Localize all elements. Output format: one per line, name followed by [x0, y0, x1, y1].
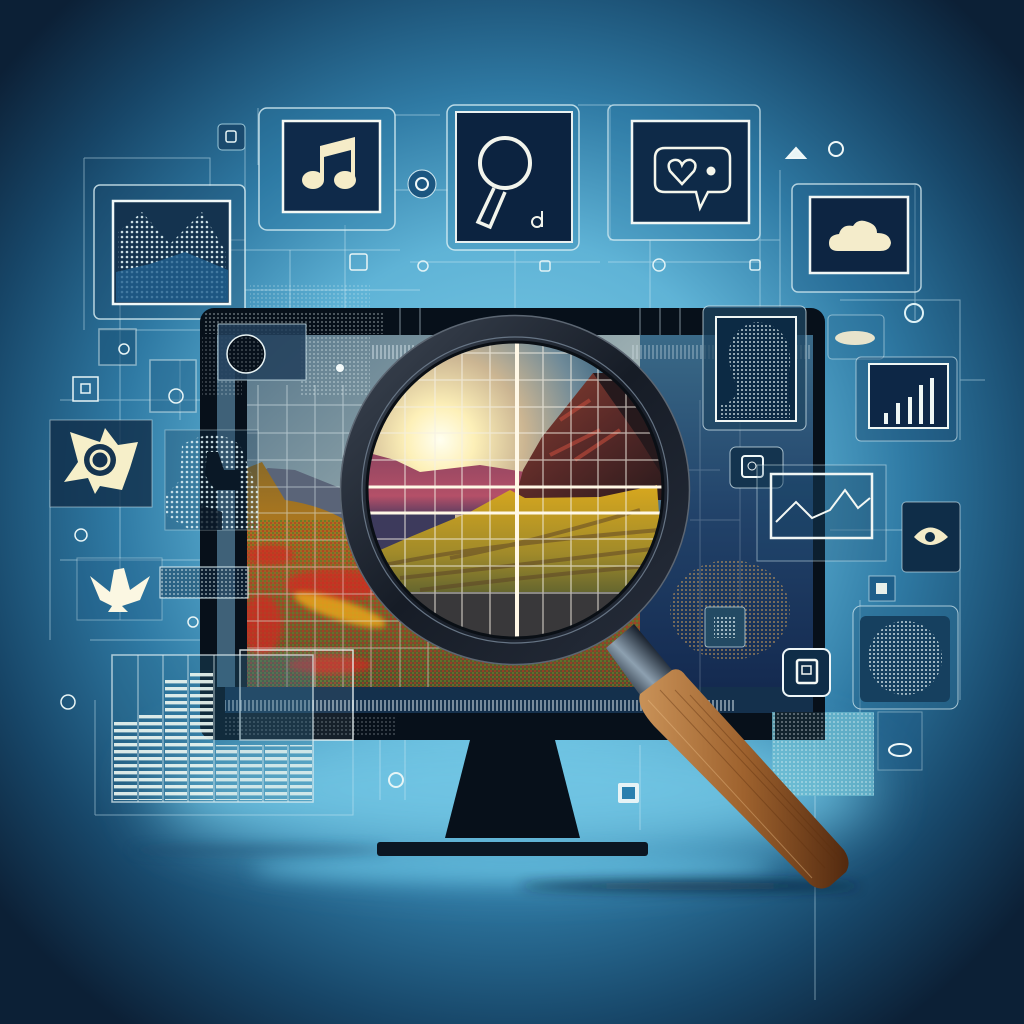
small icons right [869, 576, 895, 601]
panel: cloud [792, 184, 921, 292]
panel: eye icon [902, 502, 960, 572]
right face panel [703, 306, 806, 430]
lens image [365, 340, 665, 652]
panel: music icon [259, 108, 395, 230]
crab icon panel [77, 558, 248, 620]
small nodes row [418, 259, 760, 271]
panel: document icon [783, 649, 830, 696]
monitor [200, 308, 825, 740]
dotted strip above monitor [250, 285, 370, 308]
circle node [408, 170, 436, 198]
panel: bar chart icon right [856, 357, 957, 441]
handle [606, 624, 849, 889]
panel: heart chat [608, 105, 760, 240]
dotted head panel [165, 430, 258, 530]
small dotted icon on screen [705, 607, 745, 647]
panel: pinwheel icon [50, 420, 152, 507]
right small dish panel [828, 304, 923, 359]
left small icons [61, 254, 367, 709]
lens rim [354, 329, 676, 651]
monitor stand [377, 740, 648, 856]
panel: camera widget on monitor corner [218, 324, 344, 380]
small icons below monitor [389, 773, 639, 803]
magnifying glass [340, 316, 849, 889]
thin connector grid lines [50, 105, 985, 1000]
panel: dotted globe [853, 606, 958, 709]
dotted square lower right [772, 712, 922, 796]
panel: dotted mountains [94, 185, 245, 319]
bar chart panel [112, 650, 353, 802]
small camera icon [730, 447, 783, 488]
icon: small square top left [218, 124, 245, 150]
floor shadow [520, 881, 860, 891]
icon: small house and dial [787, 142, 843, 158]
panel: search icon [447, 105, 579, 250]
panel: line chart [757, 465, 886, 561]
